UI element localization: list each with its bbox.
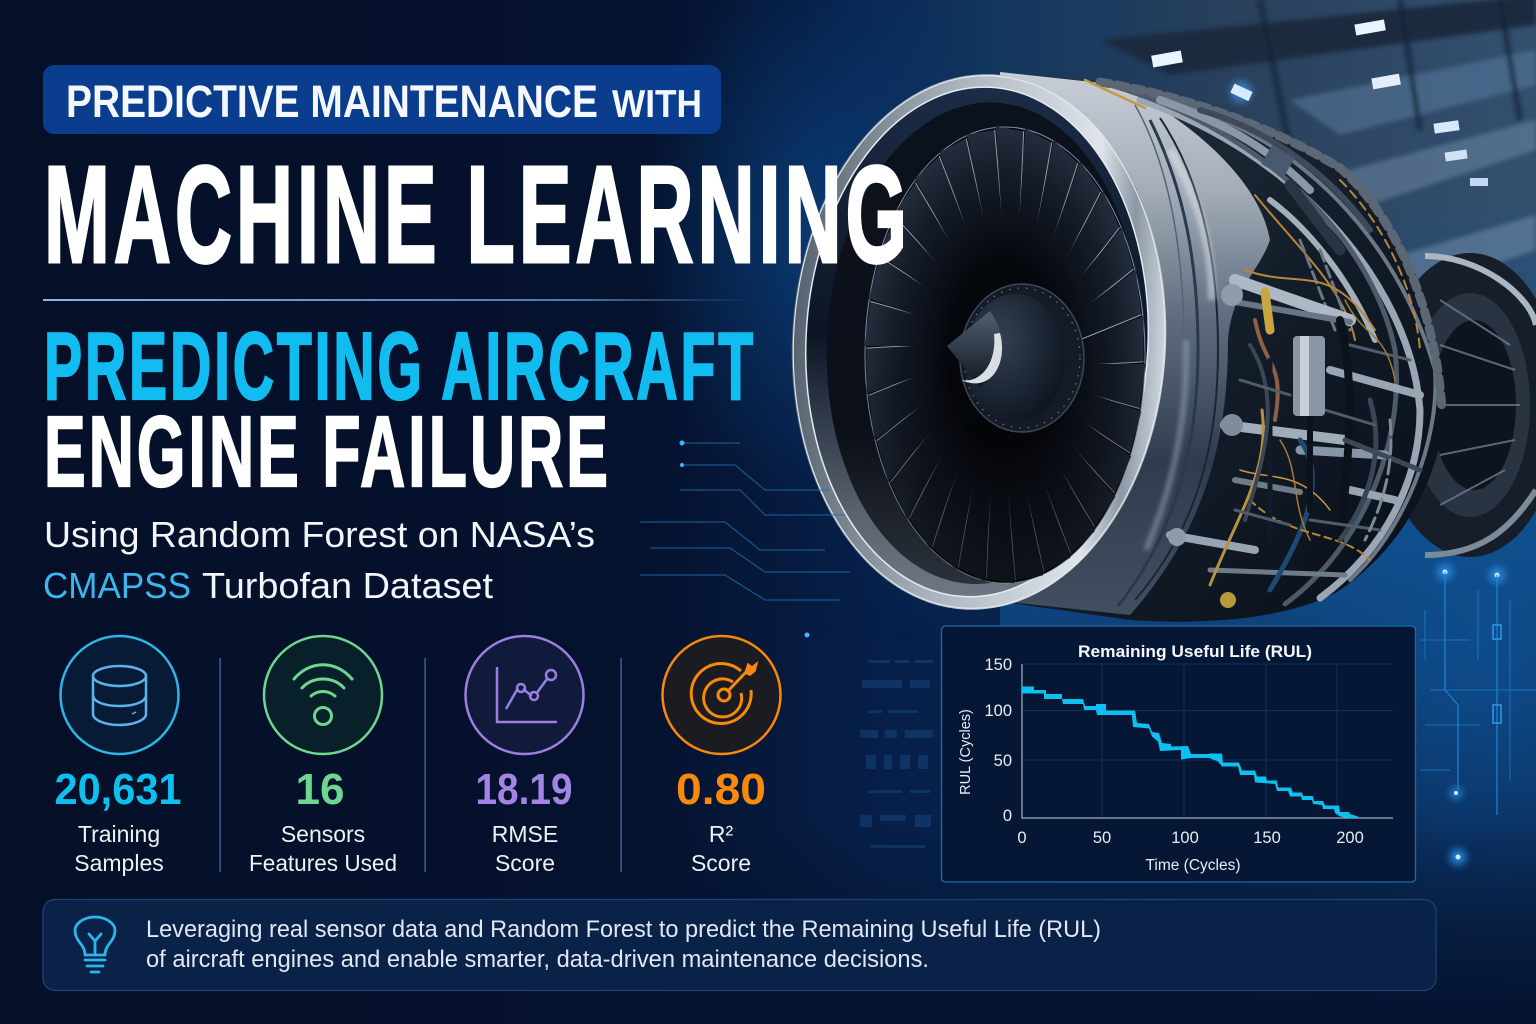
circuit board right [1420,572,1536,815]
RUL line [1022,686,1358,818]
y axis title: RUL (Cycles) [958,709,974,795]
icon: database [60,636,178,754]
stat: r squared: 0.80 [676,765,766,814]
stat: sensors [249,636,397,876]
title divider [43,299,753,301]
y axis labels: 100 [984,702,1012,720]
stat: rmse: Score [495,850,555,876]
subtitle: Using Random Forest on NASA’s [44,514,595,555]
engine body [990,72,1445,622]
callout text: Leveraging real sensor data and Random Forest to predict the Remaining Useful Life (RUL) [146,916,1101,943]
stat: sensors: 16 [296,765,344,814]
x axis labels: 0 [1017,829,1027,847]
pipes and wiring [1085,80,1442,604]
x axis labels [1017,829,1364,847]
stat: sensors: Sensors [281,821,365,847]
x axis labels: 100 [1171,829,1199,847]
x axis labels: 150 [1253,829,1281,847]
subtitle [43,514,595,606]
fan blades [864,126,1146,584]
circuit board left [860,660,933,848]
header pill [43,65,721,134]
stat: r squared [662,636,780,876]
stat: training samples: Training [78,821,160,847]
stat: r squared: R² [709,821,733,847]
front lip [778,65,1180,619]
stat divider [220,658,221,872]
subtitle: CMAPSS [43,565,191,606]
heading: predicting aircraft engine failure: ENGINE FAILURE [44,396,611,508]
icon: target [662,636,780,754]
stat divider [620,658,622,872]
x axis labels: 50 [1093,829,1111,847]
icon: light bulb [75,917,115,972]
stat: training samples: Samples [74,850,164,876]
heading: predicting aircraft engine failure [44,313,756,508]
callout [43,900,1436,990]
chart title: Remaining Useful Life (RUL) [1078,642,1312,661]
subtitle: Turbofan Dataset [202,565,493,606]
stat: training samples: 20,631 [54,765,182,814]
valve cylinder [1293,336,1325,416]
rear engine [1378,253,1536,557]
glowing data nodes [680,440,1505,865]
hangar ceiling backdrop [890,0,1536,770]
x axis title: Time (Cycles) [1145,857,1241,874]
icon: line chart [466,636,584,754]
stat: rmse [466,636,584,876]
stat: rmse: RMSE [492,821,558,847]
spinner [947,284,1084,432]
circuit traces [640,443,850,600]
main title: MACHINE LEARNING [44,138,911,292]
stat divider [424,658,426,872]
heading: predicting aircraft engine failure: PREDICTING AIRCRAFT [44,313,756,420]
header pill: PREDICTIVE MAINTENANCE [66,76,598,127]
panel: RUL chart [942,626,1416,882]
callout text [146,916,1101,973]
stat: training samples [54,636,182,876]
header pill: WITH [612,83,702,126]
main turbofan engine [778,65,1445,622]
y axis labels [984,656,1012,825]
x axis labels: 200 [1336,829,1364,847]
icon: sensor signal [264,636,382,754]
axes [1022,664,1393,818]
stat: r squared: Score [691,850,751,876]
steel casing [990,72,1270,615]
y axis labels: 50 [994,752,1012,770]
stat: rmse: 18.19 [476,765,572,814]
callout text: of aircraft engines and enable smarter, data-driven maintenance decisions. [146,946,929,973]
stat: sensors: Features Used [249,850,397,876]
y axis labels: 150 [984,656,1012,674]
y axis labels: 0 [1003,807,1012,825]
grid lines [1022,664,1393,818]
